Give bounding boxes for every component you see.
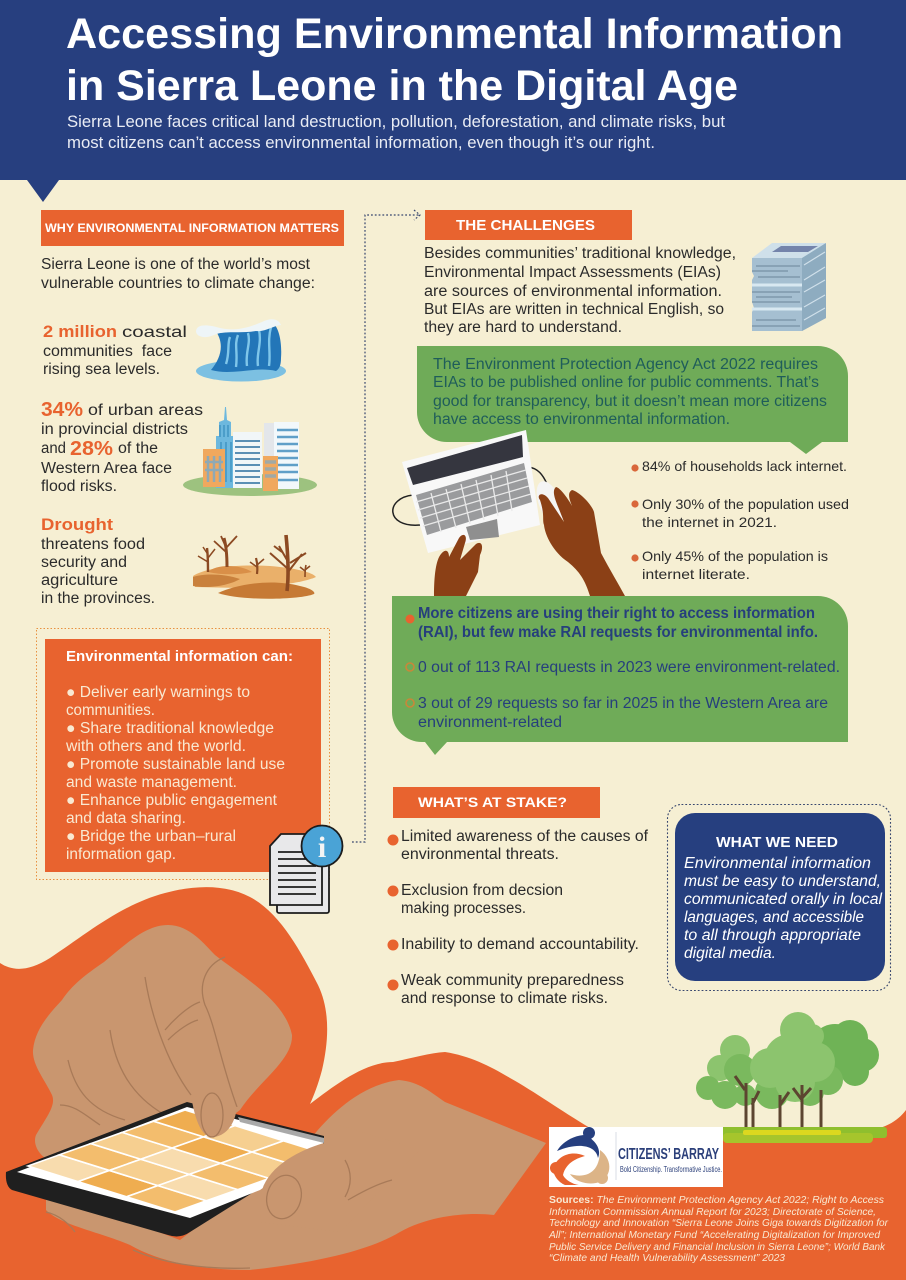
stat: flood risks: 28%: [70, 438, 113, 460]
challenges text: they are hard to understand.: [424, 319, 622, 336]
internet statistics: 84% of households lack internet.: [642, 458, 847, 474]
callout: EPA Act: [417, 346, 848, 454]
benefits list: and waste management.: [66, 774, 237, 791]
callout: RAI requests: (RAI), but few make RAI requests for environmental info.: [418, 624, 818, 641]
stat: flood risks: of the: [118, 440, 158, 457]
callout: EPA Act: The Environment Protection Agency Act 2022 requires: [433, 356, 818, 373]
icon: document with info badge: [270, 826, 342, 913]
orange background landscape: [0, 887, 906, 1280]
subtitle: [67, 113, 725, 152]
stat: flood risks: [41, 399, 203, 495]
icon: wave: [196, 319, 286, 382]
intro text: [41, 256, 315, 292]
panel: environmental information can: [36, 628, 330, 880]
heading: why environmental information matters: WHY ENVIRONMENTAL INFORMATION MATTERS: [45, 222, 339, 235]
icon: stack of documents: [752, 243, 826, 331]
subtitle: most citizens can’t access environmental information, even though it’s our right.: [67, 134, 655, 152]
stakes list: Exclusion from decsion: [401, 882, 563, 899]
sources: Technology and Innovation “Sierra Leone Joins Giga towards Digitization for: [549, 1218, 889, 1229]
benefits list: information gap.: [66, 846, 176, 863]
stakes list: making processes.: [401, 900, 526, 917]
icon: document with info badge: i: [318, 831, 326, 864]
benefits list: ● Bridge the urban–rural: [66, 828, 236, 845]
stat: drought: security and: [41, 554, 127, 571]
phone: [6, 1102, 332, 1236]
challenges text: Environmental Impact Assessments (EIAs): [424, 264, 721, 281]
benefits list: communities.: [66, 702, 155, 719]
stakes list: and response to climate risks.: [401, 990, 608, 1007]
stat: drought: threatens food: [41, 536, 145, 553]
stat: flood risks: of urban areas: [88, 402, 203, 419]
illustration: hand holding phone: [6, 925, 546, 1270]
stat: coastal communities: coastal: [122, 324, 187, 341]
challenges text: But EIAs are written in technical English, so: [424, 301, 724, 318]
stat: flood risks: 34%: [41, 399, 83, 421]
benefits list: ● Share traditional knowledge: [66, 720, 274, 737]
heading: why environmental information matters: [41, 210, 344, 246]
challenges text: are sources of environmental information.: [424, 283, 722, 300]
callout: RAI requests: 3 out of 29 requests so far in 2025 in the Western Area are: [418, 695, 828, 712]
icon: city: [183, 407, 317, 496]
heading: what's at stake: [393, 787, 600, 818]
stakes list: Weak community preparedness: [401, 972, 624, 989]
panel: what we need: communicated orally in local: [684, 891, 883, 908]
panel: what we need: languages, and accessible: [684, 909, 864, 926]
callout: RAI requests: [392, 596, 848, 755]
stat: drought: [41, 515, 155, 607]
connector arrow: [352, 210, 420, 842]
stat: coastal communities: rising sea levels.: [43, 361, 160, 378]
internet statistics: internet literate.: [642, 566, 750, 582]
intro text: Sierra Leone is one of the world’s most: [41, 256, 311, 273]
title: Accessing Environmental Information: [66, 10, 843, 58]
illustration: laptop and hands: [393, 430, 625, 596]
stakes list: [388, 828, 649, 1007]
subtitle: Sierra Leone faces critical land destruction, pollution, deforestation, and climate risks, but: [67, 113, 725, 131]
internet statistics: [631, 458, 849, 582]
callout: EPA Act: good for transparency, but it doesn’t mean more citizens: [433, 393, 827, 410]
sources: Public Service Delivery and Financial Inclusion in Sierra Leone”; World Bank: [549, 1242, 886, 1253]
benefits list: ● Promote sustainable land use: [66, 756, 285, 773]
internet statistics: Only 45% of the population is: [642, 548, 828, 564]
callout: RAI requests: 0 out of 113 RAI requests in 2023 were environment-related.: [418, 659, 840, 676]
panel: what we need: digital media.: [684, 945, 776, 962]
internet statistics: the internet in 2021.: [642, 514, 777, 530]
stat: coastal communities: [43, 322, 187, 378]
icon: drought landscape: [193, 535, 316, 599]
stat: drought: Drought: [41, 515, 113, 534]
benefits list: ● Deliver early warnings to: [66, 684, 250, 701]
stat: coastal communities: 2 million: [43, 322, 117, 341]
sources: Information Commission Annual Report for 2023; Directorate of Science,: [549, 1207, 876, 1218]
callout: RAI requests: environment-related: [418, 714, 562, 731]
benefits list: with others and the world.: [65, 738, 246, 755]
logo: Citizens' Barray: Bold Citizenship. Transformative Justice.: [620, 1165, 722, 1174]
sources: Sources: The Environment Protection Agency Act 2022; Right to Access: [549, 1195, 884, 1206]
stakes list: environmental threats.: [401, 846, 559, 863]
logo: Citizens' Barray: [549, 1127, 723, 1187]
stat: flood risks: flood risks.: [41, 478, 117, 495]
stakes list: Inability to demand accountability.: [401, 936, 639, 953]
intro text: vulnerable countries to climate change:: [41, 275, 315, 292]
benefits list: ● Enhance public engagement: [66, 792, 278, 809]
stat: coastal communities: communities face: [43, 343, 172, 360]
panel: what we need: to all through appropriate: [684, 927, 861, 944]
sources: All”; International Monetary Fund “Accelerating Digitalization for Improved: [548, 1230, 880, 1241]
stat: flood risks: in provincial districts: [41, 421, 188, 438]
logo: Citizens' Barray: CITIZENS’ BARRAY: [618, 1146, 719, 1163]
callout: RAI requests: More citizens are using their right to access information: [418, 605, 815, 622]
ground strip: [715, 1127, 887, 1143]
challenges text: Besides communities’ traditional knowledge,: [424, 245, 736, 262]
internet statistics: Only 30% of the population used: [642, 496, 849, 512]
stat: flood risks: and: [41, 440, 66, 457]
callout: EPA Act: have access to environmental information.: [433, 411, 730, 428]
benefits list: and data sharing.: [66, 810, 186, 827]
title: in Sierra Leone in the Digital Age: [66, 62, 738, 110]
panel: what we need: Environmental information: [684, 855, 871, 872]
sources: “Climate and Health Vulnerability Assessment” 2023: [549, 1253, 785, 1264]
stat: flood risks: Western Area face: [41, 460, 172, 477]
stat: drought: agriculture: [41, 572, 118, 589]
header banner: [0, 0, 906, 202]
phone screen grid: [28, 1110, 332, 1212]
benefits list: [65, 684, 285, 863]
title: [66, 10, 843, 110]
panel heading: Environmental information can:: [66, 649, 293, 665]
callout: EPA Act: EIAs to be published online for public comments. That’s: [433, 374, 819, 391]
panel: what we need: [668, 804, 890, 990]
challenges text: [424, 245, 736, 336]
panel: what we need: WHAT WE NEED: [716, 835, 838, 851]
panel: what we need: must be easy to understand,: [684, 873, 881, 890]
heading: the challenges: [425, 210, 632, 240]
sources: [548, 1195, 889, 1264]
illustration: trees: [696, 1012, 879, 1127]
stakes list: Limited awareness of the causes of: [401, 828, 649, 845]
heading: what's at stake: WHAT’S AT STAKE?: [418, 794, 567, 810]
stat: drought: in the provinces.: [41, 590, 155, 607]
heading: the challenges: THE CHALLENGES: [456, 217, 595, 234]
